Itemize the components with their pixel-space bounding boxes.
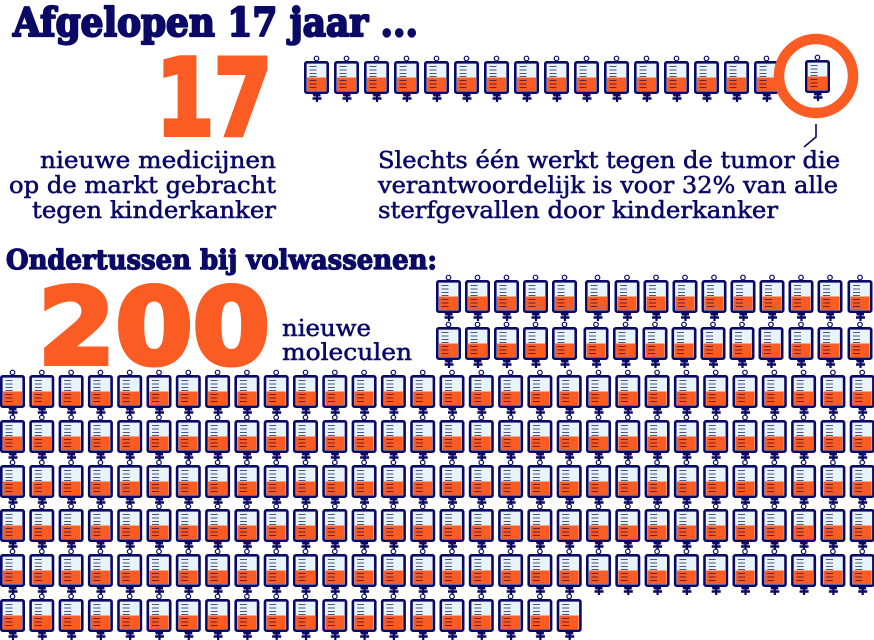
text: new molecules: [282, 316, 412, 366]
text: only one works: verantwoordelijk is voor 32% van alle: [377, 173, 838, 199]
big number: 200: 200: [38, 266, 270, 388]
text: only one works: [377, 148, 840, 224]
drip bags grid: row 4: [1, 504, 873, 550]
orange highlight circle: [779, 39, 853, 113]
text: new molecules: nieuwe: [282, 316, 371, 342]
text: new medicines: nieuwe medicijnen: [40, 148, 276, 174]
drip bags grid: top right block: [437, 275, 871, 368]
drip bags grid: row 5: [1, 549, 873, 595]
text: new medicines: op de markt gebracht: [9, 173, 277, 199]
text: new molecules: moleculen: [282, 340, 412, 366]
text: only one works: Slechts één werkt tegen de tumor die: [378, 148, 840, 174]
title: Afgelopen 17 jaar ...: [12, 0, 418, 46]
drip bags grid: row 3: [1, 460, 873, 506]
text: new medicines: [9, 148, 277, 224]
text: new medicines: tegen kinderkanker: [32, 198, 276, 224]
drip bags grid: row 6: [1, 594, 580, 640]
drip bags grid: row 1: [1, 370, 873, 416]
connector line: [804, 124, 816, 147]
big number: 17: 17: [156, 38, 272, 160]
text: only one works: sterfgevallen door kinderkanker: [378, 198, 778, 224]
drip bags grid: row 2: [1, 415, 873, 461]
heading: adults: Ondertussen bij volwassenen:: [6, 245, 437, 276]
row of 16 drip bags: [305, 56, 778, 102]
highlighted drip bag: [806, 55, 829, 101]
